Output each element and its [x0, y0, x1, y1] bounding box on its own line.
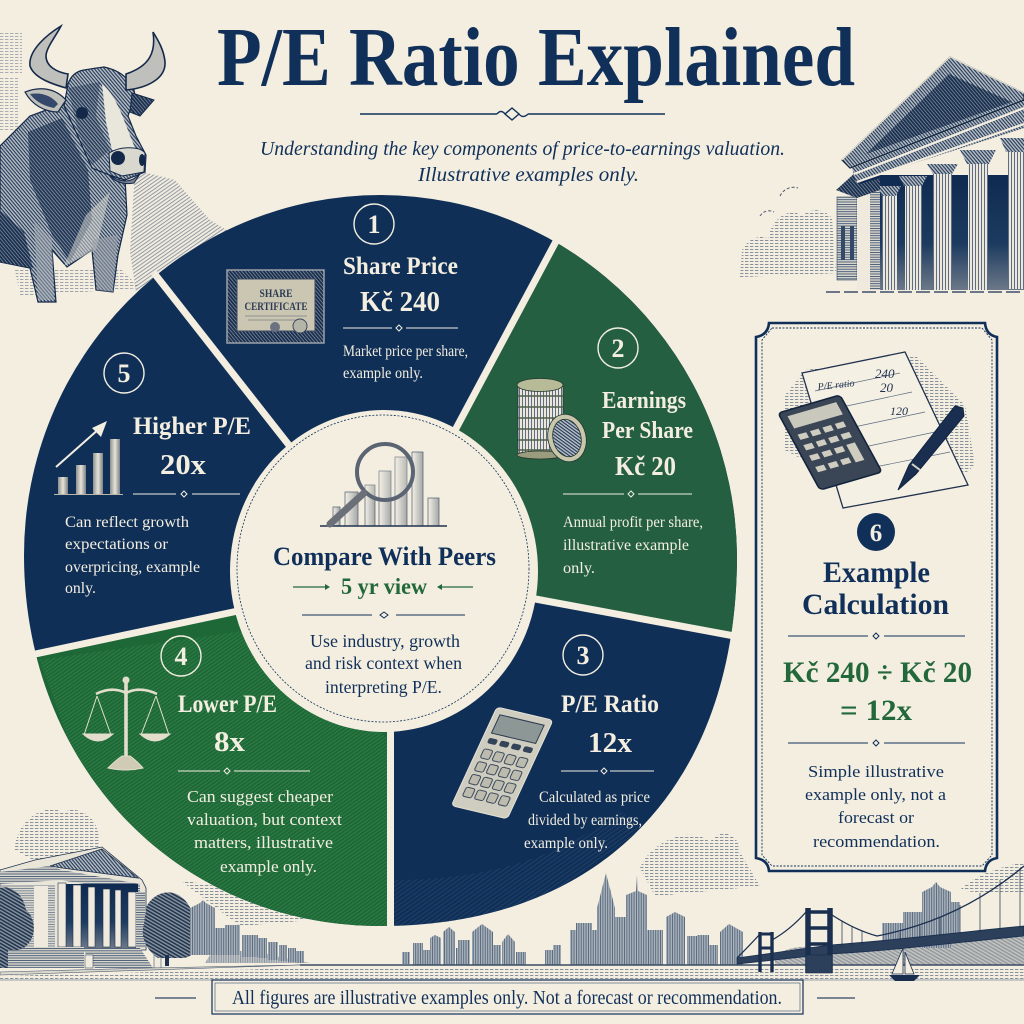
heading [802, 556, 949, 621]
value: Kč 20 [615, 451, 676, 481]
value: 12x [588, 727, 633, 759]
wheel segment 2: green [459, 244, 737, 632]
number badge 4: 4 [174, 642, 188, 671]
rule [133, 491, 240, 497]
description [805, 762, 946, 851]
wheel dividers [26, 232, 745, 932]
icon: balance scales [83, 677, 170, 770]
icon: magnifier and bars [320, 444, 447, 526]
description: illustrative example [563, 537, 689, 554]
calculation: = 12x [840, 694, 912, 727]
wheel hatching: green [40, 630, 640, 930]
suspension bridge [737, 866, 1024, 973]
description: example only. [220, 857, 317, 876]
description [343, 343, 468, 382]
description: Can reflect growth [65, 514, 189, 531]
description: and risk context when [305, 653, 462, 673]
panel frame [756, 323, 997, 871]
description: only. [65, 580, 96, 597]
subtitle [260, 138, 785, 186]
illustration: classical exchange building [740, 57, 1024, 292]
heading: Compare With Peers [273, 542, 496, 571]
centre panel: compare with peers [273, 444, 496, 697]
heading: Share Price [343, 253, 458, 280]
illustration: notepad, calculator and pen [778, 352, 975, 508]
illustration: clouds behind lower landscape [15, 809, 1024, 926]
time view label: 5 yr view [341, 574, 427, 599]
sailboat [889, 948, 920, 981]
icon: share certificate: CERTIFICATE [244, 301, 308, 313]
description [524, 789, 650, 852]
number badge 6: 6 [870, 520, 882, 547]
heading: Example [823, 556, 930, 589]
description [187, 787, 342, 876]
number badge 1: 1 [368, 210, 380, 239]
rule [563, 491, 692, 497]
heading: Higher P/E [133, 413, 251, 440]
description: Market price per share, [343, 343, 468, 360]
description: expectations or [65, 536, 169, 553]
value: 20x [160, 449, 207, 481]
description: interpreting P/E. [325, 677, 442, 697]
description: only. [563, 560, 595, 577]
time view label [293, 574, 473, 599]
segment 3: P/E ratio [451, 635, 659, 852]
rule [788, 633, 965, 639]
description: matters, illustrative [194, 833, 333, 852]
description: divided by earnings, [528, 812, 642, 829]
footer note: All figures are illustrative examples only. Not a forecast or recommendation. [232, 987, 782, 1009]
heading: Calculation [802, 588, 949, 621]
icon: share certificate: SHARE [260, 286, 292, 300]
calculation: Kč 240 ÷ Kč 20 [783, 656, 972, 689]
wheel segment 4: green [36, 615, 387, 926]
segment 5: higher P/E [54, 353, 251, 597]
title: P/E Ratio Explained [217, 11, 855, 104]
description: Calculated as price [539, 789, 650, 806]
calculation [783, 656, 972, 727]
segment 4: lower P/E [83, 636, 342, 876]
wheel segment: navy base [24, 195, 737, 926]
description: forecast or [838, 808, 914, 827]
heading: P/E Ratio [561, 691, 659, 718]
description: overpricing, example [65, 559, 200, 576]
description: Annual profit per share, [563, 514, 703, 531]
heading: Lower P/E [178, 691, 277, 718]
number badge 3: 3 [576, 641, 590, 670]
number badge 2: 2 [612, 334, 624, 363]
illustration: notepad, calculator and pen: 120 [890, 404, 908, 418]
description [305, 631, 462, 697]
number badge 1 [354, 204, 394, 244]
description: recommendation. [813, 832, 940, 851]
number badge 5: 5 [118, 359, 130, 388]
description: Simple illustrative [808, 762, 944, 781]
number badge 3 [563, 635, 603, 675]
central skyline [402, 873, 743, 965]
description: valuation, but context [187, 810, 342, 829]
distant city towers: left bank [190, 900, 310, 963]
number badge 6 [857, 513, 895, 551]
description [563, 514, 703, 577]
illustration: notepad, calculator and pen: P/E ratio [816, 378, 855, 393]
illustration: notepad, calculator and pen: 240 [875, 366, 895, 381]
title ornament [360, 108, 665, 120]
description: Use industry, growth [310, 631, 460, 651]
illustration: bull engraving [0, 26, 230, 302]
rule [343, 325, 458, 331]
rule [178, 768, 310, 774]
number badge 4 [161, 636, 201, 676]
rule [302, 612, 465, 618]
left trees [0, 887, 200, 968]
heading: Per Share [602, 418, 693, 444]
number badge 2 [598, 328, 638, 368]
footer note [155, 980, 855, 1014]
road and river [0, 965, 1024, 980]
description: example only. [524, 835, 608, 852]
rule [788, 740, 965, 746]
icon: calculator [451, 707, 553, 819]
illustration: notepad, calculator and pen: 20 [880, 380, 894, 395]
centre hub [230, 410, 538, 732]
icon: share certificate [227, 270, 324, 343]
icon: rising bars with arrow [54, 421, 123, 494]
rule [561, 768, 654, 774]
far bank greenery and towers [775, 882, 1024, 965]
heading: Earnings [602, 388, 686, 414]
value: Kč 240 [360, 287, 440, 318]
number badge 5 [104, 353, 144, 393]
description [65, 514, 200, 597]
segment 1: share price [227, 204, 468, 382]
panel: example calculation [756, 323, 997, 871]
segment 2: earnings per share [517, 328, 703, 577]
description: example only. [343, 365, 423, 382]
donut wheel [24, 195, 737, 926]
heading [602, 388, 693, 444]
icon: coins [517, 378, 591, 466]
subtitle: Understanding the key components of price-to-earnings valuation. [260, 138, 785, 160]
value: 8x [214, 726, 246, 758]
left columned building [0, 847, 161, 968]
description: Can suggest cheaper [187, 787, 333, 806]
illustration: city skyline, left building, bridge [0, 847, 1024, 981]
subtitle: Illustrative examples only. [417, 164, 639, 186]
description: example only, not a [805, 785, 946, 804]
